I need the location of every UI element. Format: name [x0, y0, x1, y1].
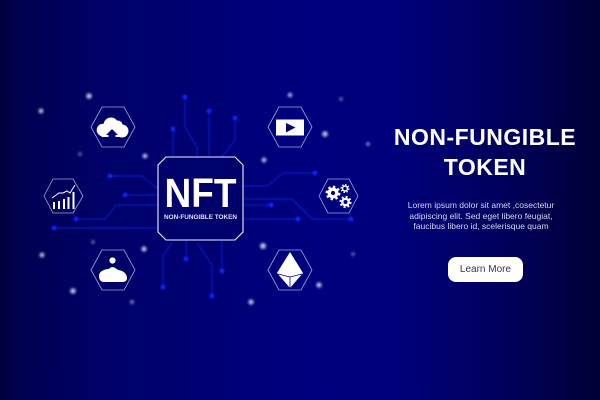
hexagon: growth chart	[44, 179, 83, 213]
body text: Lorem ipsum dolor sit amet ,cosectetur	[408, 200, 554, 210]
body text: faucibus libero id, scelerisque quam	[413, 221, 549, 231]
body text	[408, 200, 554, 231]
button: learn more: Learn More	[460, 264, 511, 275]
heading	[394, 124, 576, 180]
body text: adipiscing elit. Sed eget libero feugiat,	[409, 211, 553, 221]
NFT central box: NON-FUNGIBLE TOKEN	[164, 214, 237, 221]
heading: NON-FUNGIBLE	[394, 124, 576, 150]
hexagon: ethereum diamond	[268, 250, 312, 290]
circuit nodes	[52, 94, 354, 298]
heading: TOKEN	[444, 154, 526, 180]
hexagon: cloud upload	[91, 107, 135, 147]
button: learn more	[448, 257, 523, 282]
NFT central box: NFT	[164, 170, 236, 216]
hexagon: video player	[268, 107, 312, 147]
hexagon: landscape image	[91, 250, 135, 290]
NFT central box	[158, 157, 243, 240]
hexagon: gears	[319, 179, 358, 213]
glowing particles	[39, 93, 370, 305]
circuit traces	[54, 97, 351, 296]
